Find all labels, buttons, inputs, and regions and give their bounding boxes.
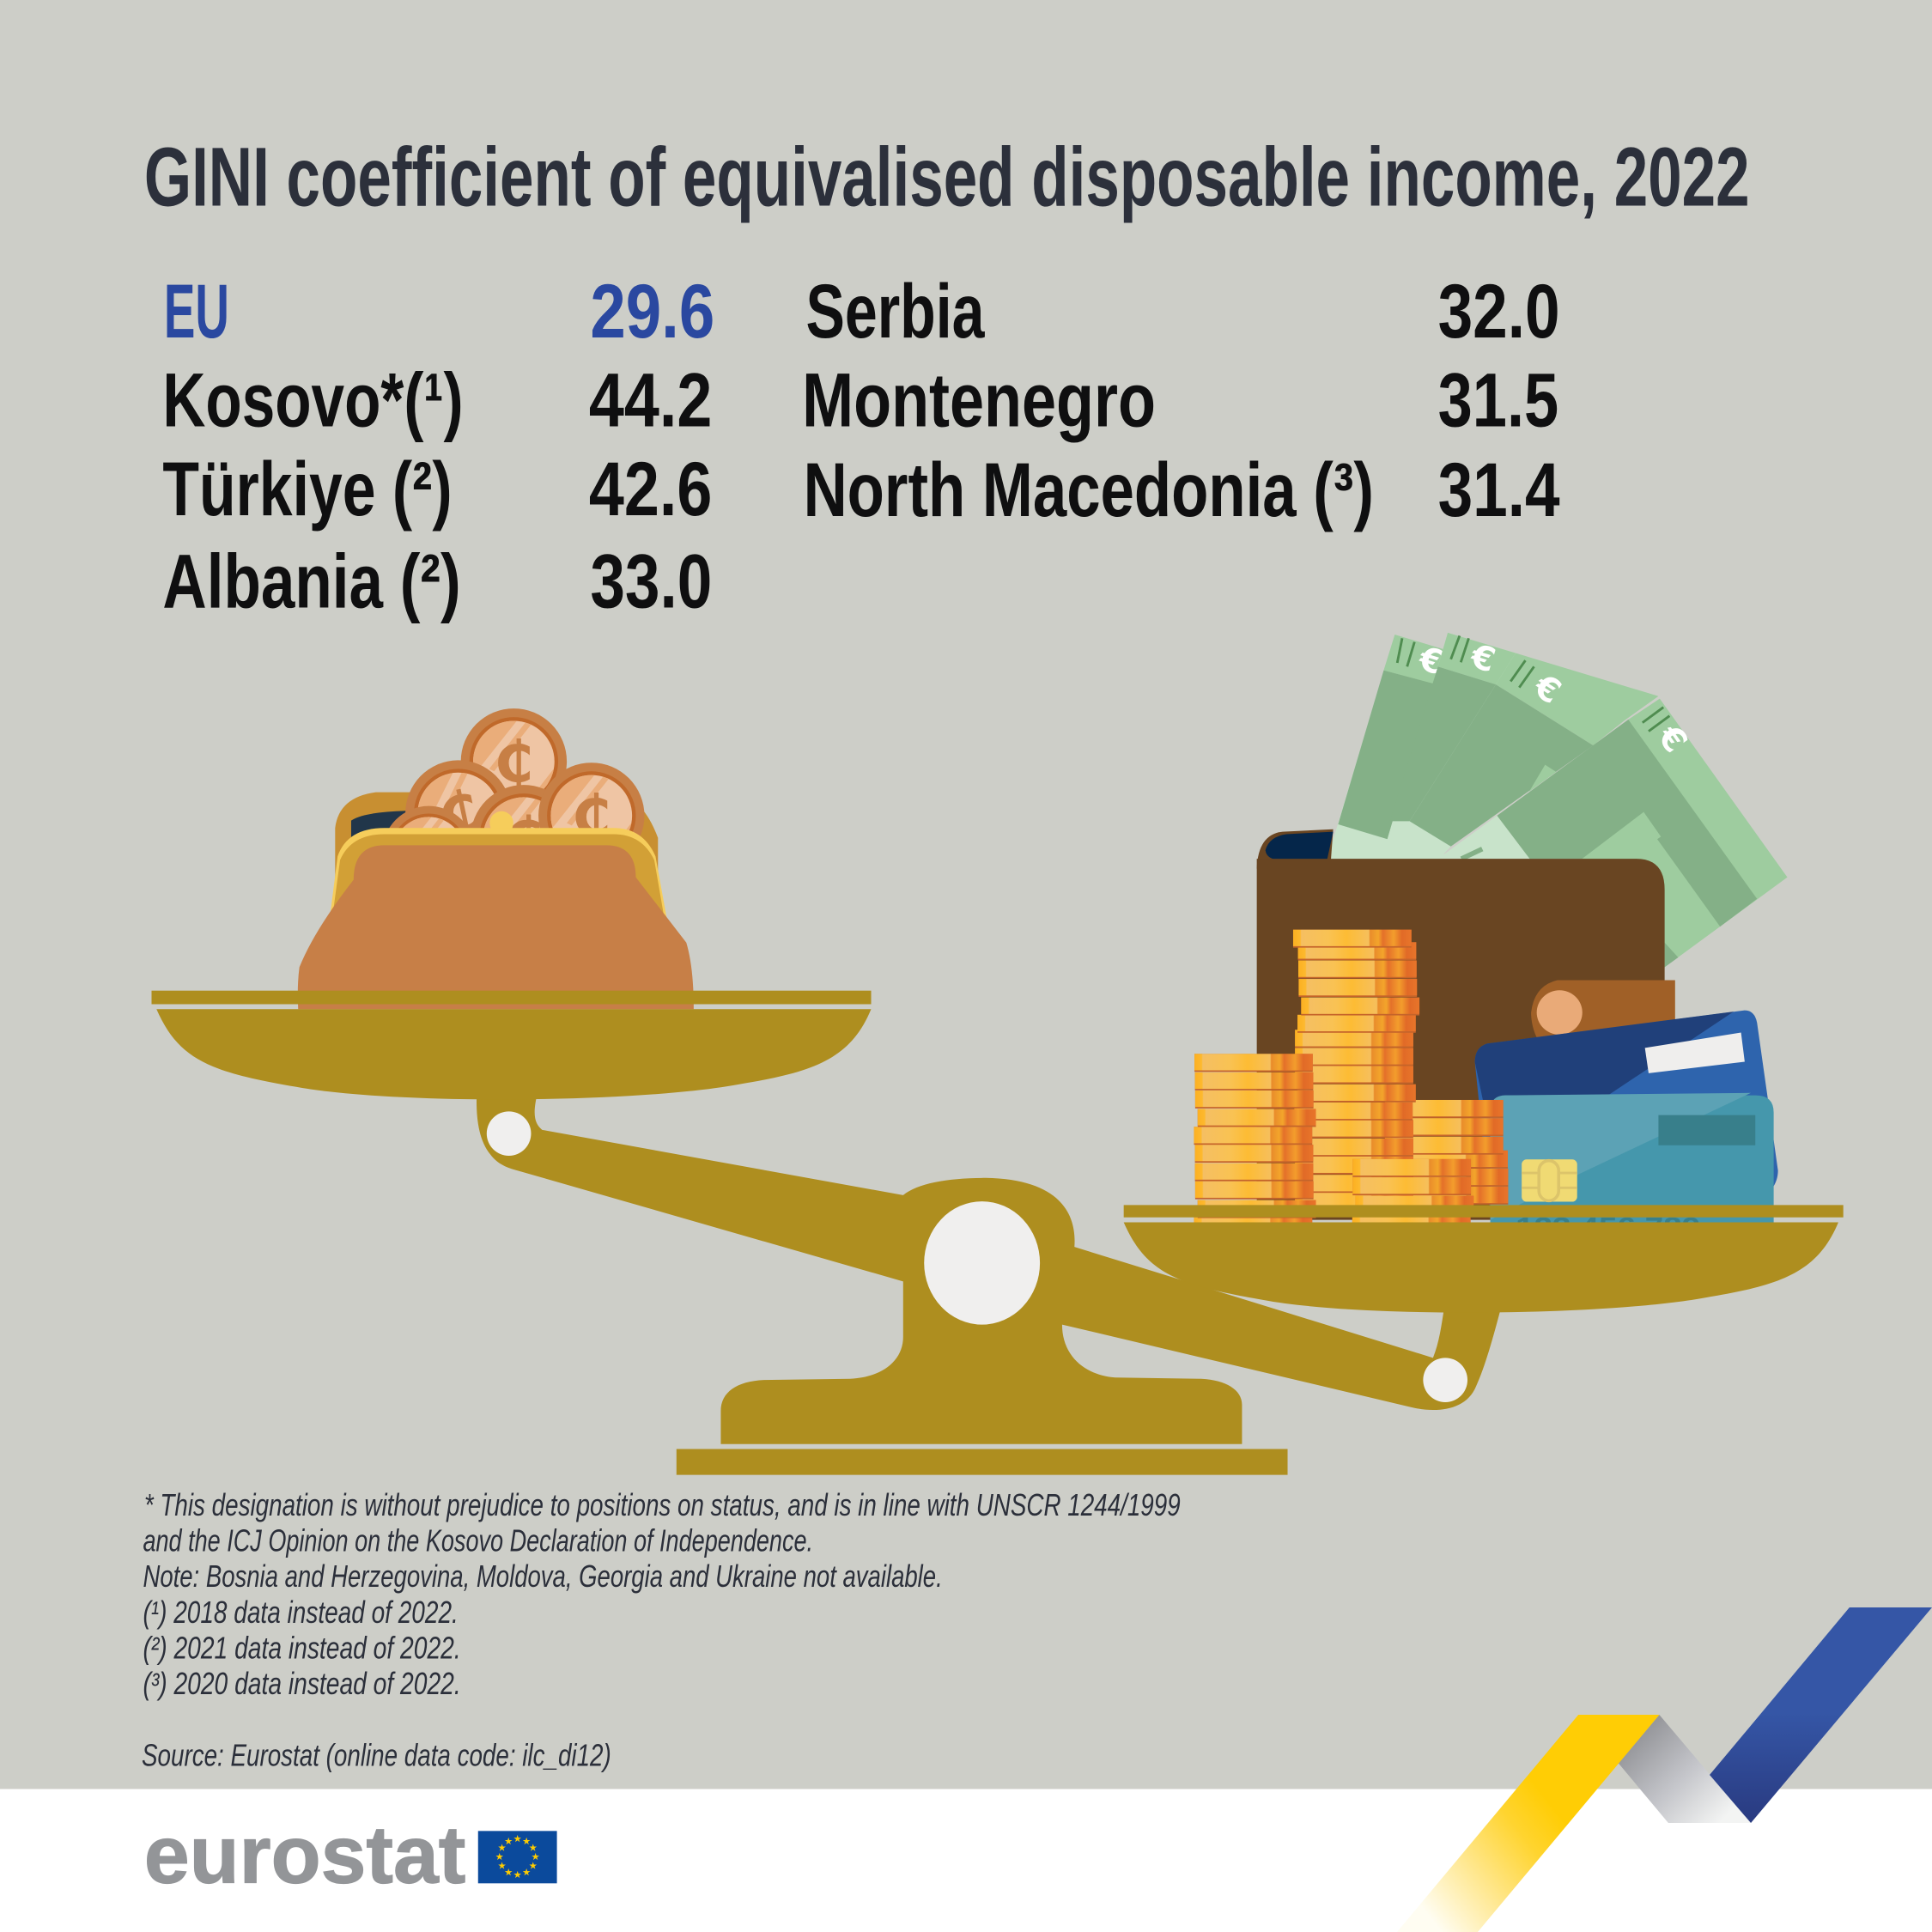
left pan bowl <box>156 1009 872 1099</box>
banknote 3: € <box>1527 666 1567 712</box>
North Macedonia value: 31.4 <box>1438 447 1560 532</box>
designation note line 1: * This designation is without prejudice to positions on status, and is in line with UNSCR 1244/1999 <box>144 1488 1181 1522</box>
banknote 3 <box>1392 653 1658 860</box>
Serbia value: 32.0 <box>1438 268 1560 354</box>
card signature strip <box>1645 1032 1745 1073</box>
purse clasp knob <box>489 811 513 835</box>
footnote 1: (¹) 2018 data instead of 2022. <box>143 1595 459 1630</box>
right pan bowl <box>1124 1222 1838 1313</box>
banknote 4 <box>1438 699 1788 967</box>
banknote 4: € <box>1649 718 1695 760</box>
availability note: Note: Bosnia and Herzegovina, Moldova, Georgia and Ukraine not available. <box>143 1559 943 1594</box>
banknote 1 <box>1327 635 1467 860</box>
banknote 2 <box>1382 633 1516 860</box>
scale base plate <box>677 1449 1288 1475</box>
icon: gold coin stack, tall <box>1293 930 1419 1211</box>
Serbia label: Serbia <box>805 268 986 354</box>
Turkiye label: Türkiye (²) <box>162 446 453 532</box>
pivot, left <box>487 1111 531 1156</box>
coin: middle: ₵ <box>504 805 544 872</box>
coin: top: ₵ <box>494 729 533 795</box>
footnote 2: (²) 2021 data instead of 2022. <box>143 1631 461 1665</box>
North Macedonia label: North Macedonia (³) <box>804 447 1374 532</box>
icon: EU flag <box>478 1831 557 1883</box>
icon: gold coin stack, left <box>1194 1054 1316 1236</box>
card chip <box>1522 1159 1577 1202</box>
card number: 123 456 789 <box>1516 1211 1700 1242</box>
purse body <box>298 845 694 1009</box>
EU label: EU <box>164 268 229 354</box>
coin: middle <box>471 785 577 890</box>
eurostat logo <box>144 1810 557 1901</box>
Turkiye value: 42.6 <box>589 446 712 532</box>
purse back frame <box>335 793 658 900</box>
wallet clasp button <box>1537 990 1583 1035</box>
Albania value: 33.0 <box>590 538 712 623</box>
wallet back flap <box>1257 829 1334 869</box>
purse lining <box>351 811 419 838</box>
coin: right: ₵ <box>572 783 611 849</box>
ribbon: grey segment <box>1619 1715 1751 1823</box>
data list: left column <box>162 268 714 623</box>
decorative ribbon <box>1397 1607 1932 1932</box>
data list: right column <box>802 268 1560 532</box>
EU value: 29.6 <box>590 268 714 354</box>
scale beam and stand <box>477 1091 1501 1444</box>
coin: right <box>538 762 644 869</box>
designation note line 2: and the ICJ Opinion on the Kosovo Declaration of Independence. <box>143 1524 813 1558</box>
Montenegro label: Montenegro <box>802 356 1156 442</box>
icon: balance scale <box>151 991 1844 1475</box>
coin: left: ₵ <box>432 777 484 850</box>
Montenegro value: 31.5 <box>1438 356 1558 442</box>
wallet lining <box>1266 832 1334 860</box>
icon: euro banknotes <box>1327 633 1788 967</box>
ribbon: blue segment <box>1710 1607 1932 1823</box>
icon: gold coin stack, back right <box>1385 1100 1508 1205</box>
Kosovo label: Kosovo*(¹) <box>162 356 464 442</box>
purse frame inner <box>331 834 665 924</box>
left pan rim <box>151 991 872 1004</box>
footer band <box>0 1789 1932 1932</box>
ribbon: yellow segment <box>1397 1715 1659 1932</box>
right pan rim <box>1124 1205 1844 1218</box>
card magnetic block <box>1658 1115 1755 1145</box>
pivot, right <box>1423 1358 1467 1402</box>
wallet body <box>1257 859 1665 1220</box>
pivot, centre <box>924 1201 1040 1325</box>
icon: coin purse <box>298 708 694 1009</box>
banknote 2: € <box>1466 636 1499 681</box>
Albania label: Albania (²) <box>162 538 461 623</box>
icon: teal bank card <box>1491 1092 1774 1223</box>
Kosovo value: 44.2 <box>589 356 712 442</box>
card dark shade <box>1475 1012 1734 1109</box>
coin: lower left <box>382 806 476 899</box>
banknote 1: € <box>1413 639 1448 683</box>
source: Source: Eurostat (online data code: ilc_di12) <box>142 1738 611 1772</box>
coin: lower left: ₵ <box>411 823 447 882</box>
footnote 3: (³) 2020 data instead of 2022. <box>143 1667 461 1701</box>
icon: wallet <box>1257 829 1675 1220</box>
purse front frame <box>329 828 668 924</box>
coin: left <box>396 750 521 876</box>
logo wordmark: eurostat <box>144 1810 465 1901</box>
coin: top <box>461 708 567 815</box>
icon: gold coin stack, front low <box>1352 1159 1473 1231</box>
card light shade <box>1491 1093 1751 1220</box>
wallet clasp tab <box>1531 981 1675 1060</box>
footnotes <box>142 1488 1181 1772</box>
icon: blue bank card <box>1475 1011 1778 1220</box>
